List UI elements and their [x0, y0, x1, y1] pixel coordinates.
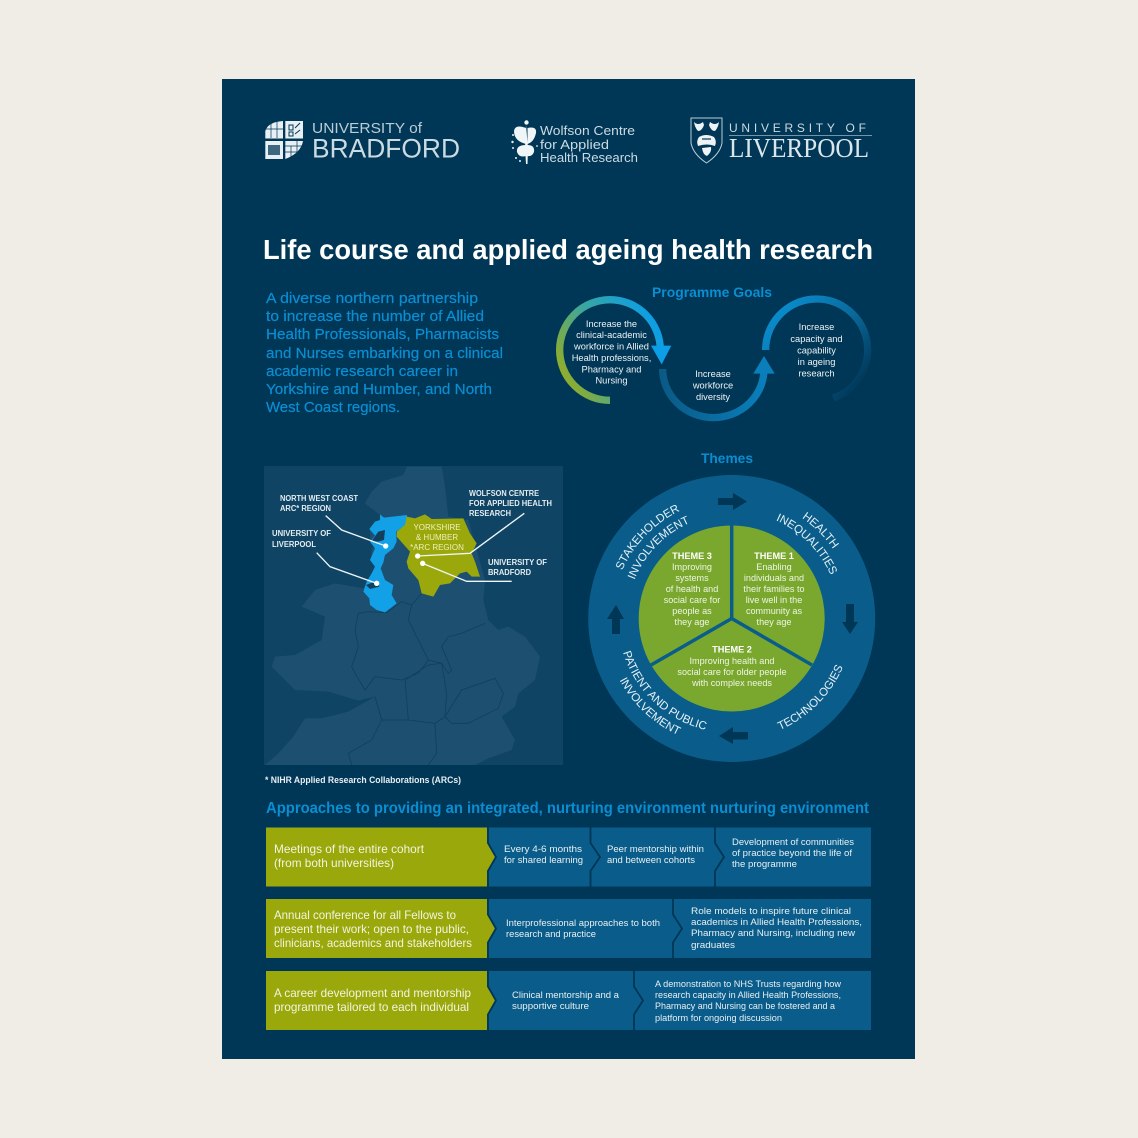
row 1 lead: Meetings of the entire cohort	[274, 842, 425, 856]
row 3 cell 2: Pharmacy and Nursing can be fostered and a	[655, 1001, 836, 1012]
goal 1 text: Increase the	[586, 319, 637, 329]
theme 1: they age	[757, 617, 791, 627]
goal 2 text	[692, 369, 733, 402]
goal 1 text: workforce in Allied	[573, 342, 649, 352]
map label: University of Liverpool: UNIVERSITY OF	[272, 529, 331, 538]
logo: University of Bradford	[265, 120, 460, 164]
theme 3	[664, 551, 720, 627]
ring label: patient and public involvement: PATIENT AND PUBLIC	[623, 650, 707, 730]
theme 3: of health and	[666, 584, 718, 594]
row 2 cell 1: Interprofessional approaches to both	[506, 918, 660, 929]
map label: Yorkshire and Humber: *ARC REGION	[410, 543, 464, 552]
map label: North West Coast	[280, 494, 358, 513]
map label: Yorkshire and Humber: YORKSHIRE	[413, 523, 461, 532]
intro text block: academic research career in	[266, 364, 458, 380]
ring label: health inequalities: HEALTH	[802, 512, 839, 548]
logo: University of Bradford: BRADFORD	[312, 134, 460, 164]
theme 1: individuals and	[744, 573, 804, 583]
logo: Wolfson Centre	[511, 120, 638, 165]
goal 2 text: diversity	[696, 392, 730, 402]
map label: Yorkshire and Humber: & HUMBER	[416, 533, 458, 542]
theme 1: live well in the	[746, 595, 802, 605]
row 1 cell 2: and between cohorts	[607, 855, 695, 866]
row 1 cell 2: Peer mentorship within	[607, 844, 704, 855]
intro text block: A diverse northern partnership	[266, 291, 478, 307]
segment dividers	[651, 525, 812, 665]
theme 2: social care for older people	[677, 667, 787, 677]
map label: Yorkshire and Humber	[410, 523, 464, 552]
goal 1 text: Health professions,	[572, 353, 651, 363]
map label: Wolfson Centre: RESEARCH	[469, 509, 511, 518]
ring arrows	[607, 493, 858, 744]
goal 3 text: in ageing	[798, 357, 835, 367]
map label: University of Bradford: BRADFORD	[488, 568, 531, 577]
North West Coast region	[363, 514, 409, 612]
row 2 lead	[266, 899, 495, 958]
row 1 cell 2	[607, 844, 704, 866]
theme 3: social care for	[664, 595, 720, 605]
theme 1: THEME 1	[754, 551, 794, 561]
row 3 cell 1: Clinical mentorship and a	[512, 990, 620, 1001]
row 1 cell 3	[732, 837, 854, 870]
goal 3 text	[790, 322, 843, 378]
heading: approaches: Approaches to providing an integrated, nurturing environment nurturing environment	[266, 800, 869, 817]
intro text block: Health Professionals, Pharmacists	[266, 327, 499, 343]
map of northern England and Wales	[265, 467, 540, 765]
Yorkshire and Humber region	[397, 514, 480, 597]
theme 3: THEME 3	[672, 551, 712, 561]
row 2 cell 2: graduates	[691, 940, 735, 951]
theme 2	[677, 644, 787, 688]
row 3 lead: programme tailored to each individual	[274, 1000, 469, 1014]
theme 3: they age	[675, 617, 709, 627]
map label: University of Liverpool	[272, 529, 331, 549]
row 2 cell 1	[506, 918, 660, 940]
row 3 cell 1: supportive culture	[512, 1001, 589, 1012]
row 1 cell 3: Development of communities	[732, 837, 854, 848]
heading: programme goals: Programme Goals	[652, 284, 772, 300]
goals flow arcs and arrows	[560, 299, 868, 418]
map regions	[363, 514, 480, 612]
row 1 cell 3: of practice beyond the life of	[732, 848, 852, 859]
logo: University of Bradford: UNIVERSITY of	[312, 120, 423, 137]
logo: Wolfson Centre: Health Research	[540, 150, 638, 165]
row 1 cell 1: for shared learning	[504, 855, 583, 866]
map label: North West Coast: ARC* REGION	[280, 504, 331, 513]
row 1 cell 1: Every 4-6 months	[504, 844, 582, 855]
intro text block: West Coast regions.	[266, 400, 400, 416]
goal 1 text: Nursing	[595, 376, 628, 386]
logo: University of Liverpool: LIVERPOOL	[729, 133, 869, 163]
inner green circle	[639, 526, 825, 712]
row 3 cell 2: A demonstration to NHS Trusts regarding how	[655, 979, 841, 990]
row 3 cell 2: platform for ongoing discussion	[655, 1013, 782, 1024]
goal 3 text: research	[798, 368, 835, 378]
goal 2 text: workforce	[692, 380, 733, 390]
panel: programme goals	[560, 284, 868, 418]
logo: Wolfson Centre: Wolfson Centre	[540, 123, 635, 138]
goal 1 text: Pharmacy and	[582, 364, 641, 374]
row 1 lead	[266, 828, 495, 886]
row 2 cell 2	[691, 906, 862, 951]
logo: University of Liverpool	[691, 118, 872, 163]
theme 2: THEME 2	[712, 644, 752, 654]
theme 2: with complex needs	[691, 678, 772, 688]
goal 3 text: Increase	[799, 322, 834, 332]
ring label: patient and public involvement: INVOLVEMENT	[620, 677, 682, 734]
theme 2: Improving health and	[690, 656, 774, 666]
row 3 cell 2: research capacity in Allied Health Professions,	[655, 990, 841, 1001]
heading: themes: Themes	[701, 450, 753, 466]
theme 3: systems	[675, 573, 709, 583]
map label: Wolfson Centre: WOLFSON CENTRE	[469, 489, 540, 498]
row 1 lead: (from both universities)	[274, 856, 394, 870]
row 1 cell 1	[504, 844, 583, 866]
row 1: meetings	[266, 828, 871, 886]
row 3: career development	[266, 971, 871, 1030]
panel: themes	[588, 450, 876, 762]
map label: University of Bradford	[488, 558, 547, 577]
intro text block	[266, 291, 503, 416]
title: Life course and applied ageing health research	[263, 234, 873, 265]
intro text block: and Nurses embarking on a clinical	[266, 346, 503, 362]
theme 3: people as	[672, 606, 712, 616]
theme 1: Enabling	[756, 562, 792, 572]
goal 3 text: capability	[797, 346, 836, 356]
map label: University of Liverpool: LIVERPOOL	[272, 540, 316, 549]
row 2 lead: clinicians, academics and stakeholders	[274, 936, 472, 950]
outer ring	[588, 475, 875, 762]
row 1 cell 3: the programme	[732, 859, 797, 870]
goal 1 text: clinical-academic	[576, 330, 647, 340]
theme 1: community as	[746, 606, 802, 616]
goal 3 text: capacity and	[790, 334, 843, 344]
theme 1	[743, 551, 805, 627]
map label: Wolfson Centre	[469, 489, 552, 518]
theme 1: their families to	[743, 584, 805, 594]
row 3 lead	[266, 971, 495, 1030]
intro text block: Yorkshire and Humber, and North	[266, 382, 492, 398]
map label: Wolfson Centre: FOR APPLIED HEALTH	[469, 499, 552, 508]
goal 1 text	[572, 319, 651, 386]
theme 3: Improving	[672, 562, 712, 572]
row 2 lead: present their work; open to the public,	[274, 922, 469, 936]
logo: University of Liverpool: UNIVERSITY OF	[729, 121, 866, 135]
goal 2 text: Increase	[695, 369, 731, 379]
intro text block: to increase the number of Allied	[266, 309, 484, 325]
row 2 cell 2: Role models to inspire future clinical	[691, 906, 851, 917]
map label: North West Coast: NORTH WEST COAST	[280, 494, 358, 503]
row 3 cell 1	[512, 990, 620, 1012]
pointer lines	[317, 513, 524, 586]
ring label: health inequalities: INEQUALITIES	[776, 514, 837, 574]
panel: map	[264, 466, 563, 765]
row 3 cell 2	[655, 979, 841, 1024]
ring label: stakeholder involvement: STAKEHOLDER	[616, 505, 680, 570]
footnote: * NIHR Applied Research Collaborations (ARCs)	[265, 775, 461, 785]
poster background	[222, 79, 915, 1059]
row 2 cell 2: Pharmacy and Nursing, including new	[691, 928, 855, 939]
row 3 lead: A career development and mentorship	[274, 986, 471, 1000]
row 2 lead: Annual conference for all Fellows to	[274, 908, 456, 922]
row 2 cell 1: research and practice	[506, 929, 596, 940]
ring label: technologies: TECHNOLOGIES	[776, 664, 842, 729]
ring label: stakeholder involvement: INVOLVEMENT	[628, 516, 688, 579]
row 2 cell 2: academics in Allied Health Professions,	[691, 917, 862, 928]
row 2: annual conference	[266, 899, 871, 958]
logo: Wolfson Centre: for Applied	[540, 137, 609, 152]
map label: University of Bradford: UNIVERSITY OF	[488, 558, 547, 567]
